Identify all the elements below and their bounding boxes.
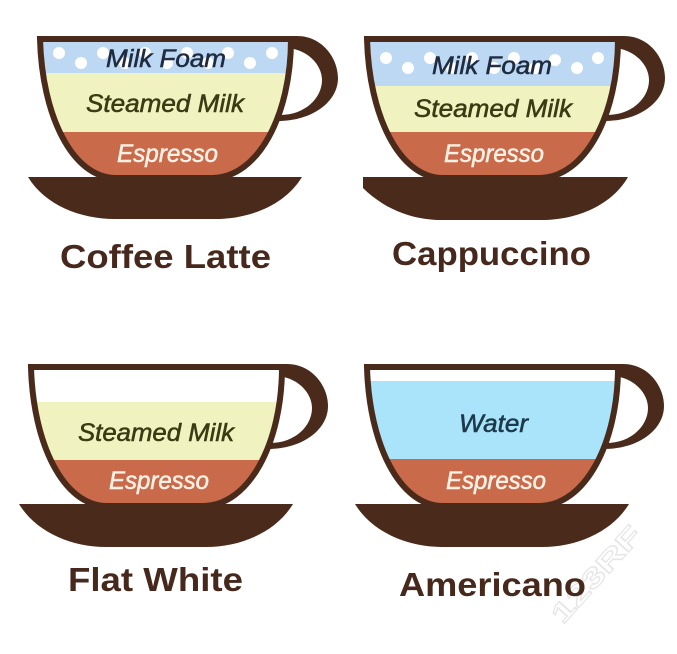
cup outline [40,39,291,178]
saucer [19,504,293,547]
title: flat white: Flat White [68,561,243,598]
title: americano: Americano [399,566,586,603]
cup outline [367,367,618,506]
cup handle [605,36,665,121]
panel: coffee latte [28,36,338,275]
cup handle [278,36,338,121]
label: milk foam: Milk Foam [432,52,552,80]
label: espresso: Espresso [117,140,218,168]
watermark: 123RF [545,520,648,629]
cup layers [370,370,615,503]
label: espresso: Espresso [446,467,546,495]
label: steamed milk: Steamed Milk [86,90,246,118]
panel: flat white [19,364,328,598]
cup layers [43,42,288,175]
panel: americano [355,364,664,603]
label: espresso: Espresso [109,467,209,495]
label: water: Water [459,410,530,438]
saucer [363,177,628,220]
label: espresso: Espresso [444,140,544,168]
saucer [28,177,302,219]
cup layers [370,42,615,175]
label: steamed milk: Steamed Milk [78,419,236,447]
label: steamed milk: Steamed Milk [414,95,574,123]
saucer [355,504,629,547]
cup outline [31,367,282,506]
cup outline [367,39,618,178]
panel: cappuccino [357,36,665,272]
cup handle [268,364,328,449]
title: cappuccino: Cappuccino [392,235,591,272]
label: milk foam: Milk Foam [106,45,226,73]
cup handle [604,364,664,449]
cup layers [37,370,279,503]
title: coffee latte: Coffee Latte [60,238,271,275]
